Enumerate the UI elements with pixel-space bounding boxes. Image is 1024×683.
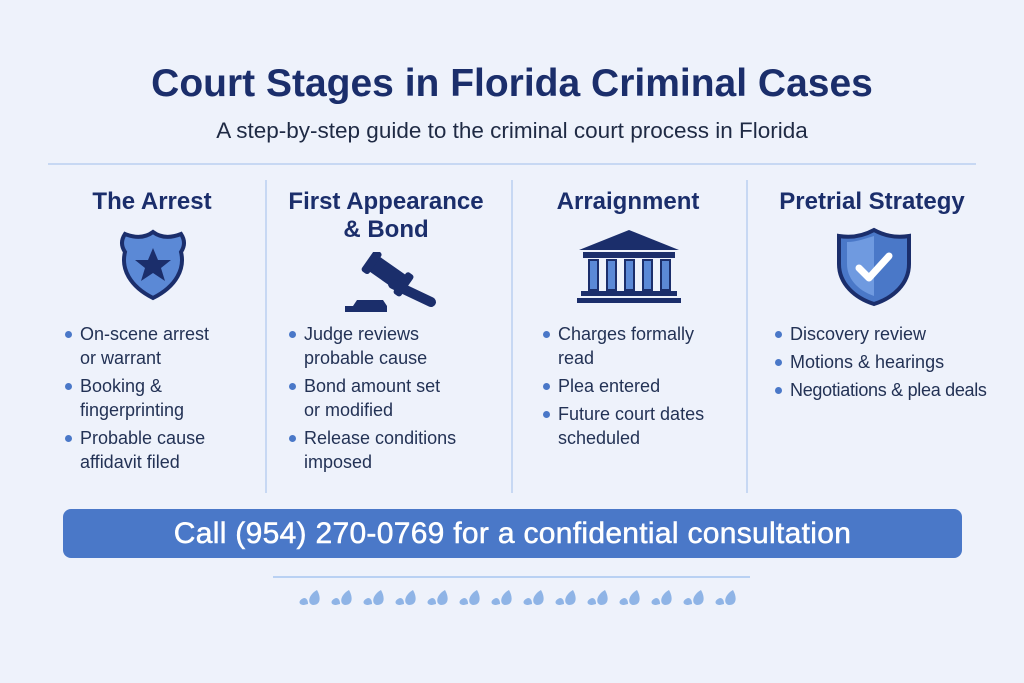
title: Court Stages in Florida Criminal Cases [151, 62, 873, 105]
heading: Arraignment [557, 188, 699, 215]
subtitle: A step-by-step guide to the criminal court process in Florida [216, 118, 808, 143]
bullet list: Booking & [80, 376, 162, 396]
bullet list: Release conditions [304, 428, 456, 448]
bullet list: or warrant [80, 348, 161, 368]
call to action banner: Call (954) 270-0769 for a confidential consultation [174, 517, 851, 550]
bullet list: Negotiations & plea deals [790, 380, 987, 400]
bullet list: or modified [304, 400, 393, 420]
bullet list: fingerprinting [80, 400, 184, 420]
bullet list: Charges formally [558, 324, 694, 344]
decorative drops row [300, 590, 736, 605]
call to action banner [63, 509, 962, 558]
panel: the arrest [65, 188, 212, 472]
heading [288, 188, 484, 243]
bullet list: scheduled [558, 428, 640, 448]
heading: The Arrest [92, 188, 212, 215]
bullet list: Discovery review [790, 324, 926, 344]
heading: & Bond [343, 216, 429, 243]
heading: Pretrial Strategy [779, 188, 965, 215]
bullet list [775, 324, 987, 400]
bullet list: read [558, 348, 594, 368]
bullet list: affidavit filed [80, 452, 180, 472]
bullet list [543, 324, 704, 448]
bullet list: On-scene arrest [80, 324, 209, 344]
bullet list: Motions & hearings [790, 352, 944, 372]
bullet list: Probable cause [80, 428, 205, 448]
bullet list: Bond amount set [304, 376, 440, 396]
bullet list: Plea entered [558, 376, 660, 396]
bullet list: Future court dates [558, 404, 704, 424]
icon: police badge [120, 230, 186, 300]
bullet list [65, 324, 209, 472]
icon: courthouse [577, 230, 681, 303]
bullet list: probable cause [304, 348, 427, 368]
bullet list [289, 324, 456, 472]
heading: First Appearance [288, 188, 484, 215]
bullet list: Judge reviews [304, 324, 419, 344]
panel: pretrial strategy [775, 188, 987, 400]
panel: arraignment [543, 188, 704, 448]
icon: gavel [345, 252, 436, 312]
bullet list: imposed [304, 452, 372, 472]
icon: shield check [837, 228, 911, 306]
panel: first appearance [288, 188, 484, 472]
